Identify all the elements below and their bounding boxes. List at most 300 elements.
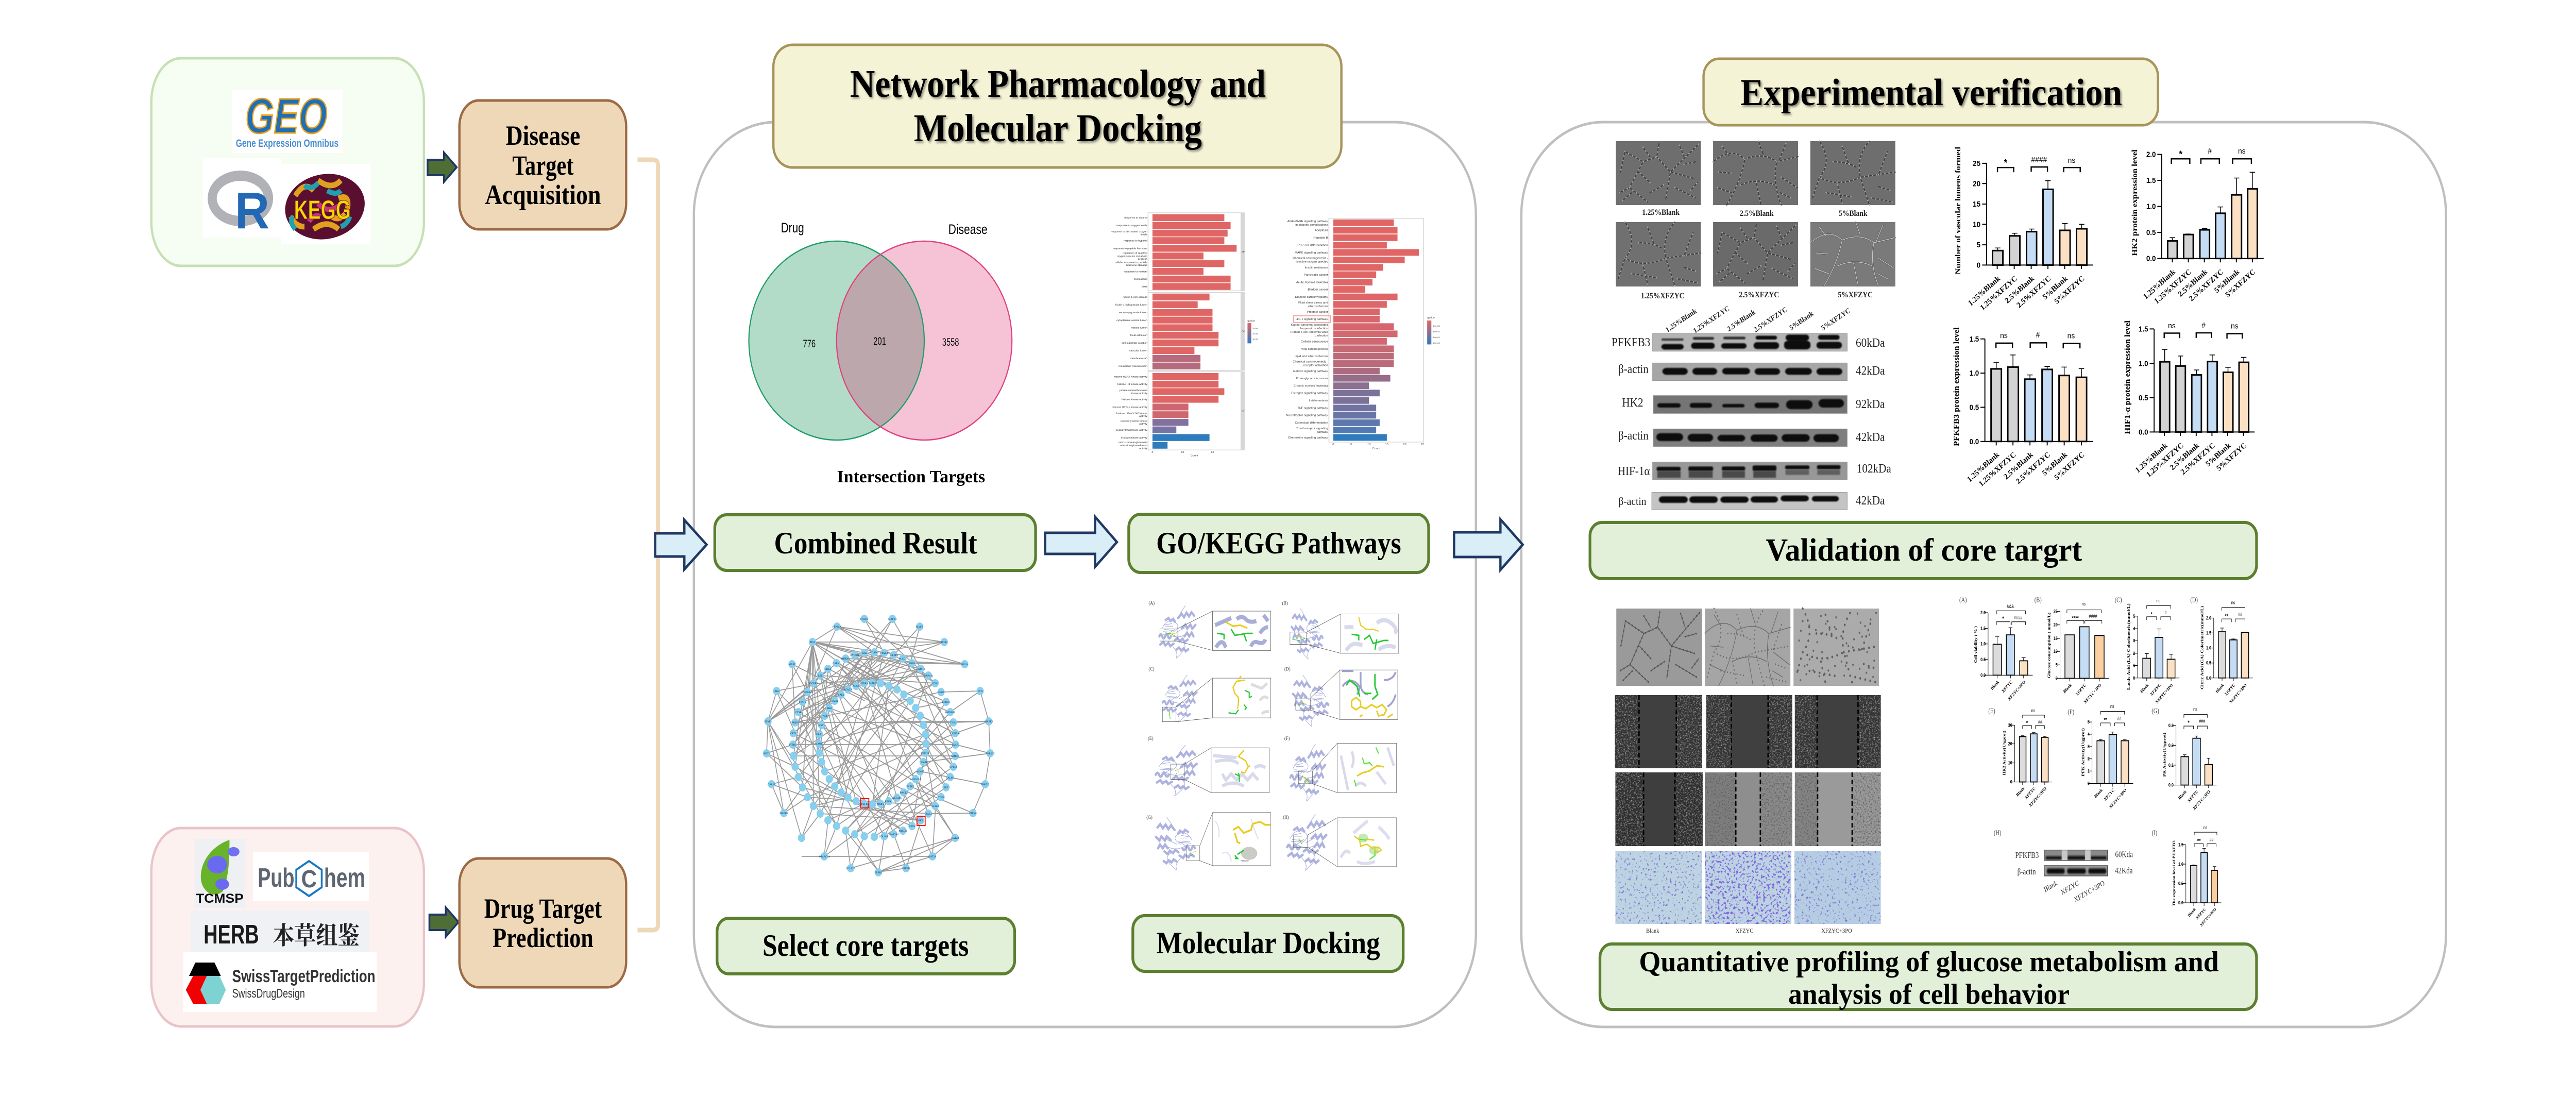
network: protein interaction: RELA bbox=[961, 663, 968, 666]
box: Molecular Docking: Molecular Docking bbox=[1157, 926, 1380, 960]
bar chart: GO enrichment: 1e-08 bbox=[1252, 327, 1258, 330]
chart C: lactic acid: XFZYC bbox=[2149, 682, 2162, 697]
network: protein interaction: IRAK1 bbox=[925, 813, 932, 816]
network: protein interaction: GSK3B bbox=[768, 783, 776, 786]
bar chart: GO enrichment: response to hypoxia bbox=[1124, 240, 1147, 242]
bar chart: GO enrichment: hormone stimulus bbox=[1126, 264, 1148, 267]
western blots: core targets: PFKFB3 bbox=[1612, 335, 1650, 349]
bar chart: GO enrichment: response to peptide hormone bbox=[1113, 247, 1147, 250]
chart F: PFK activity: ns bbox=[2110, 704, 2114, 709]
chart: vascular lumens: 2.5%XFZYC bbox=[2015, 274, 2053, 310]
docking inset B bbox=[1341, 614, 1399, 653]
network: protein interaction: SIRT2 bbox=[869, 682, 876, 685]
chart E: HK2 activity: 10 bbox=[2008, 761, 2012, 766]
network: protein interaction: NQO1 bbox=[853, 685, 860, 688]
chart: HK2 protein expression: 5%XFZYC bbox=[2224, 268, 2257, 299]
network: protein interaction: SAE1 bbox=[838, 694, 844, 697]
chart: PFKFB3 protein expression: 1.5 bbox=[1970, 334, 1979, 343]
bar chart: KEGG enrichment: Hepatitis B bbox=[1313, 237, 1328, 240]
chart: HIF1-α protein expression: 2.5%Blank bbox=[2168, 441, 2201, 472]
chart: HK2 protein expression: # bbox=[2208, 147, 2212, 156]
bar chart: GO enrichment: 10 bbox=[1181, 451, 1184, 454]
arrow: into network pharmacology bbox=[655, 520, 706, 569]
chart A: cell viability: 0.5 bbox=[1980, 657, 1986, 662]
bar chart: GO enrichment: focal adhesion bbox=[1130, 334, 1147, 337]
chart: HK2 protein expression: 2.5%Blank bbox=[2177, 267, 2209, 299]
chart: HIF1-α protein expression: 5%Blank bbox=[2205, 441, 2233, 468]
bar chart: KEGG enrichment: 5 bbox=[1350, 443, 1352, 446]
chart: HK2 protein expression: 0.0 bbox=[2146, 254, 2156, 263]
network: protein interaction: PDGFRB bbox=[808, 682, 819, 685]
bar chart: KEGG enrichment: Bladder cancer bbox=[1308, 289, 1328, 291]
network: protein interaction: AKR1C1 bbox=[986, 752, 995, 755]
chart B: glucose consumption: **** bbox=[2072, 615, 2079, 621]
network: protein interaction: SMARCA4 bbox=[818, 855, 831, 858]
network: protein interaction: DNMT1 bbox=[917, 668, 925, 671]
chart F: PFK activity bbox=[2081, 704, 2133, 810]
chart: HIF1-α protein expression: 2.5%XFZYC bbox=[2179, 441, 2217, 477]
bar chart: GO enrichment: histone H3Y41 kinase activity bbox=[1113, 406, 1148, 409]
logo: PubChem: C bbox=[301, 865, 317, 893]
bar chart: GO enrichment: 20 bbox=[1211, 451, 1214, 454]
box: GO/KEGG Pathways: GO/KEGG Pathways bbox=[1156, 527, 1401, 561]
chart: HK2 protein expression: 2.0 bbox=[2146, 150, 2156, 159]
chart B: glucose consumption bbox=[2047, 601, 2109, 705]
micrographs: tube formation, scratch and transwell assays: Blank bbox=[1646, 927, 1659, 934]
network: protein interaction: AMPD3 bbox=[951, 755, 960, 758]
bar chart: KEGG enrichment: reactive oxygen species bbox=[1296, 261, 1328, 264]
network: protein interaction: ACACA bbox=[843, 688, 853, 692]
western blots: core targets: 102kDa bbox=[1857, 462, 1891, 475]
network: protein interaction: MAP2K4 bbox=[889, 833, 899, 836]
chart B: glucose consumption: 10 bbox=[2054, 649, 2058, 654]
chart I: PFKFB3 expression: 1.5 bbox=[2178, 842, 2183, 848]
bar chart: GO enrichment: 0 bbox=[1151, 451, 1154, 454]
network: protein interaction: TOP1 bbox=[938, 796, 944, 799]
venn diagram: 201 bbox=[873, 335, 886, 347]
bar chart: GO enrichment: kinase activity bbox=[1131, 392, 1148, 395]
logo: R bbox=[202, 158, 281, 239]
network: protein interaction: CALM3 bbox=[946, 777, 955, 780]
box: Combined Result bbox=[715, 515, 1036, 570]
network: protein interaction: ITGA2B bbox=[846, 867, 855, 870]
chart: vascular lumens: ns bbox=[2068, 157, 2075, 165]
chart: PFKFB3 protein expression: ns bbox=[2000, 332, 2008, 340]
western blots: core targets: HK2 bbox=[1622, 396, 1643, 409]
chart E: HK2 activity: HK2 Activity(U/gprot) bbox=[2002, 731, 2006, 775]
chart: HIF1-α protein expression: # bbox=[2201, 321, 2206, 330]
network: protein interaction: STAT3 bbox=[765, 720, 772, 723]
molecular docking images: (A) bbox=[1148, 600, 1155, 606]
bar chart: GO enrichment: 3e-08 bbox=[1252, 338, 1258, 341]
chart A: cell viability: &&& bbox=[2007, 604, 2014, 609]
panel: drug databases bbox=[151, 828, 424, 1026]
docking inset F bbox=[1337, 744, 1397, 792]
network: protein interaction: KAT2B bbox=[951, 837, 959, 840]
chart G: PK activity: XFZYC bbox=[2187, 789, 2199, 803]
bar chart: GO enrichment: cell-substrate junction bbox=[1122, 342, 1147, 345]
network: protein interaction: PARP2 bbox=[791, 721, 799, 724]
bar chart: GO enrichment: oxygen species metabolic bbox=[1117, 255, 1148, 258]
chart D: citric acid: Citric Acid (CA) Colorimetric(mmol/L) bbox=[2200, 605, 2204, 689]
bar chart: GO enrichment: cytoplasmic vesicle lumen bbox=[1116, 319, 1147, 322]
chart: HIF1-α protein expression: 5%XFZYC bbox=[2215, 441, 2248, 473]
network: protein interaction: TNNI3 bbox=[821, 715, 828, 718]
bar chart: KEGG enrichment: Th17 cell differentiation bbox=[1297, 244, 1328, 247]
docking inset E bbox=[1211, 748, 1269, 792]
chart E: HK2 activity: XFZYC bbox=[2024, 786, 2036, 800]
box: Drug Target Prediction bbox=[460, 858, 626, 987]
network: protein interaction: MAPK3 bbox=[985, 720, 993, 723]
bar chart: KEGG enrichment: 25 bbox=[1421, 443, 1424, 446]
bar chart: KEGG enrichment: Chemokine signaling pathway bbox=[1288, 436, 1328, 440]
chart E: HK2 activity: * bbox=[2026, 720, 2028, 727]
chart G: PK activity: XFZYC+3PO bbox=[2192, 789, 2211, 811]
chart D: citric acid: 2.0 bbox=[2206, 616, 2211, 621]
logo: GEO: GEO bbox=[245, 89, 327, 144]
chart: HIF1-α protein expression: 1.25%XFZYC bbox=[2145, 441, 2185, 479]
venn diagram: 3558 bbox=[942, 336, 959, 348]
chart C: lactic acid: 3 bbox=[2133, 638, 2136, 644]
chart F: PFK activity: 5 bbox=[2088, 719, 2090, 724]
chart: HK2 protein expression: 2.5%XFZYC bbox=[2188, 268, 2225, 303]
chart: HIF1-α protein expression: 1.25%Blank bbox=[2134, 441, 2170, 475]
bar chart: KEGG enrichment: Chemical carcinogenesis - bbox=[1293, 257, 1328, 260]
network: protein interaction: KAT2A bbox=[928, 855, 937, 858]
box: Disease Target Acquisition: Disease bbox=[506, 121, 580, 151]
venn diagram: Drug bbox=[781, 221, 804, 235]
chart A: cell viability: Cell viability ( % ) bbox=[1974, 626, 1978, 663]
network: protein interaction: FYN bbox=[978, 690, 983, 693]
box: GO/KEGG Pathways bbox=[1129, 514, 1429, 572]
network: protein interaction: PRMT1 bbox=[921, 752, 929, 755]
chart C: lactic acid bbox=[2127, 598, 2179, 705]
bar chart: KEGG enrichment: TNF signaling pathway bbox=[1297, 407, 1328, 410]
chart: vascular lumens: 5%Blank bbox=[2041, 274, 2070, 301]
chart D: citric acid: XFZYC bbox=[2224, 682, 2236, 697]
chart I: PFKFB3 expression: XFZYC bbox=[2195, 907, 2207, 921]
bar chart: KEGG enrichment: Viral carcinogenesis bbox=[1301, 348, 1328, 351]
bar chart: KEGG enrichment: Proteoglycans in cancer bbox=[1296, 377, 1328, 380]
bar chart: KEGG enrichment: Leishmaniasis bbox=[1309, 399, 1328, 402]
bar chart: GO enrichment: ficolin-1-rich granule bbox=[1123, 296, 1147, 299]
bar chart: GO enrichment: membrane raft bbox=[1130, 357, 1148, 360]
chart: vascular lumens: 20 bbox=[1973, 179, 1980, 188]
chart F: PFK activity: XFZYC+3PO bbox=[2109, 787, 2127, 810]
network: protein interaction: FASN bbox=[832, 700, 838, 703]
chart C: lactic acid: 1 bbox=[2133, 663, 2136, 668]
chart: HIF1-α protein expression: ns bbox=[2168, 322, 2176, 330]
title: Network Pharmacology and Molecular Docking: Network Pharmacology and bbox=[850, 62, 1266, 106]
chart C: lactic acid: Blank bbox=[2140, 682, 2149, 694]
chart: HIF1-α protein expression: HIF1-α protein expression level bbox=[2123, 321, 2132, 434]
arrow: databases to drug target bbox=[429, 907, 459, 937]
transwell row bbox=[1615, 851, 1881, 924]
arrow: into experimental verification bbox=[1454, 519, 1523, 570]
docking inset G bbox=[1213, 813, 1271, 866]
bar chart: KEGG enrichment: atherosclerosis bbox=[1308, 305, 1328, 308]
chart B: glucose consumption: 5 bbox=[2056, 663, 2058, 668]
bar charts: validation bbox=[1952, 147, 2264, 488]
bar chart: KEGG enrichment: 5.0e-05 bbox=[1433, 325, 1440, 327]
western blots: core targets: 42kDa bbox=[1856, 430, 1885, 444]
network: protein interaction: PRKCQ bbox=[981, 783, 989, 786]
chart D: citric acid: 0.0 bbox=[2206, 676, 2211, 681]
chart F: PFK activity: Blank bbox=[2093, 787, 2104, 799]
network: protein interaction: TNK2 bbox=[950, 721, 957, 724]
chart F: PFK activity: ** bbox=[2104, 717, 2107, 723]
bar chart: KEGG enrichment: Diabetic cardiomyopathy bbox=[1295, 296, 1328, 299]
chart: PFKFB3 protein expression: 1.0 bbox=[1970, 369, 1979, 377]
network: protein interaction: VCAM1 bbox=[870, 651, 879, 654]
chart: vascular lumens bbox=[1954, 147, 2093, 312]
chart D: citric acid: 1.0 bbox=[2206, 646, 2211, 651]
chart B: glucose consumption: Glucose consumption ( mmol/L) bbox=[2047, 612, 2051, 679]
docking inset G: ASN-259 bbox=[1241, 859, 1249, 862]
bar chart: GO enrichment: activity bbox=[1139, 423, 1148, 426]
panel: disease databases bbox=[151, 58, 424, 266]
network: protein interaction: PTK2B bbox=[902, 867, 910, 870]
network: protein interaction: FKBP5 bbox=[906, 785, 914, 788]
network: protein interaction: SIRT1 bbox=[818, 724, 825, 727]
chart: PFKFB3 protein expression: 1.25%XFZYC bbox=[1977, 450, 2018, 488]
chart G: PK activity: 0.3 bbox=[2168, 723, 2174, 728]
network: protein interaction: IMPDH2 bbox=[841, 657, 851, 661]
chart F: PFK activity: 0 bbox=[2088, 781, 2090, 786]
bar chart: KEGG enrichment: MAPK signaling pathway bbox=[1295, 251, 1328, 255]
chart I: PFKFB3 expression: ns bbox=[2204, 825, 2207, 830]
chart: vascular lumens: 2.5%Blank bbox=[2004, 274, 2036, 305]
bar chart: GO enrichment: chemotaxis bbox=[1134, 278, 1148, 281]
micrographs: tube formation six panels: 1.25%XFZYC bbox=[1641, 292, 1685, 300]
bar chart: KEGG enrichment: 20 bbox=[1403, 443, 1406, 446]
bar chart: KEGG enrichment: in diabetic complications bbox=[1295, 224, 1328, 227]
chart: PFKFB3 protein expression bbox=[1952, 327, 2093, 488]
bar chart: KEGG enrichment: Fluid shear stress and bbox=[1298, 301, 1328, 305]
bar chart: KEGG enrichment: Lipid and atherosclerosis bbox=[1295, 355, 1328, 358]
docking inset H bbox=[1337, 818, 1397, 867]
bar chart: KEGG enrichment: Acute myeloid leukemia bbox=[1296, 281, 1328, 284]
bar chart: KEGG enrichment: 15 bbox=[1385, 443, 1388, 446]
box: Disease Target Acquisition: Target bbox=[512, 150, 574, 181]
chart A: cell viability: 1.5 bbox=[1980, 626, 1986, 631]
micrographs: tube formation, scratch and transwell assays: XFZYC+3PO bbox=[1821, 927, 1852, 934]
network: protein interaction: DDR1 bbox=[941, 641, 947, 644]
bar chart: KEGG enrichment: Kaposi sarcoma-associated bbox=[1291, 324, 1328, 327]
chart G: PK activity: Blank bbox=[2177, 789, 2188, 801]
chart I: PFKFB3 expression: ## bbox=[2209, 837, 2214, 842]
venn diagram bbox=[749, 221, 1012, 486]
bar chart: GO enrichment: vesicle lumen bbox=[1131, 327, 1147, 330]
chart D: citric acid: ** bbox=[2225, 613, 2228, 619]
bar chart: GO enrichment: taxis bbox=[1142, 285, 1148, 289]
chart G: PK activity: 0.0 bbox=[2168, 783, 2174, 788]
western blot H: PFKFB3: 42Kda bbox=[2115, 867, 2133, 876]
bar chart: GO enrichment: peptidyltransferase activity bbox=[1116, 429, 1148, 432]
western blot H: PFKFB3: PFKFB3 bbox=[2015, 851, 2039, 860]
western blots: core targets: 5%Blank bbox=[1788, 309, 1815, 332]
chart E: HK2 activity bbox=[2002, 708, 2052, 808]
chart A: cell viability: * bbox=[2002, 616, 2004, 622]
bar chart: KEGG enrichment: Neurotrophin signaling pathway bbox=[1286, 414, 1328, 417]
chart: HIF1-α protein expression: 1.5 bbox=[2139, 325, 2148, 333]
bar chart: KEGG enrichment: Chemical carcinogenesis - bbox=[1293, 361, 1328, 364]
bar charts: glucose metabolism: (G) bbox=[2151, 707, 2159, 715]
docking inset C bbox=[1213, 676, 1271, 718]
logo: SwissTargetPrediction bbox=[183, 952, 377, 1012]
chart F: PFK activity: 4 bbox=[2088, 732, 2090, 737]
network: protein interaction: AHR bbox=[827, 707, 832, 710]
bar chart: KEGG enrichment: AGE-RAGE signaling pathway bbox=[1287, 220, 1328, 223]
chart B: glucose consumption: ns bbox=[2082, 601, 2086, 606]
network: protein interaction: HCK bbox=[862, 652, 868, 655]
bar chart: GO enrichment: histone H3 kinase activity bbox=[1117, 383, 1148, 386]
logo: PubChem: hem bbox=[324, 863, 365, 893]
bar chart: GO enrichment: response to decreased oxygen bbox=[1111, 230, 1147, 233]
logo: TCMSP: TCMSP bbox=[196, 891, 244, 905]
network: protein interaction: MAPK1 bbox=[888, 618, 897, 621]
bar charts: glucose metabolism: (B) bbox=[2035, 596, 2042, 604]
chart: PFKFB3 protein expression: 5%Blank bbox=[2041, 450, 2069, 478]
logo: HERB: HERB bbox=[204, 920, 259, 950]
micrographs: tube formation, scratch and transwell assays: XFZYC bbox=[1736, 927, 1753, 934]
bracket: joining both target sets bbox=[637, 160, 658, 930]
bar chart: KEGG enrichment: Chronic myeloid leukemia bbox=[1294, 385, 1328, 387]
bar chart: GO enrichment: ADP-ribosyltransferase bbox=[1120, 444, 1147, 447]
bar chart: GO enrichment: levels bbox=[1141, 233, 1148, 236]
molecular docking images: (H) bbox=[1283, 814, 1289, 820]
network: protein interaction: CAPN1 bbox=[833, 662, 841, 665]
logo: KEGG: KEGG bbox=[294, 195, 351, 225]
panel: experimental container bbox=[1521, 122, 2446, 1027]
bar chart: KEGG enrichment: 10 bbox=[1367, 443, 1370, 446]
western blots: core targets: 42kDa bbox=[1856, 364, 1885, 377]
bar charts: glucose metabolism: (H) bbox=[1994, 829, 2001, 837]
chart F: PFK activity: 1 bbox=[2088, 769, 2090, 774]
bar chart: KEGG enrichment: Prostate cancer bbox=[1307, 311, 1328, 314]
bar chart: KEGG enrichment: Estrogen signaling pathway bbox=[1291, 392, 1328, 395]
tube formation row bbox=[1616, 609, 1879, 686]
western blots: core targets: 42kDa bbox=[1856, 494, 1885, 507]
chart I: PFKFB3 expression: The expression level of PFKFB3 bbox=[2172, 840, 2176, 906]
micrographs: tube formation six panels: 5%XFZYC bbox=[1838, 291, 1873, 299]
network: protein interaction: CPT2 bbox=[790, 732, 796, 735]
chart: vascular lumens: #### bbox=[2031, 156, 2047, 164]
western blots: core targets bbox=[1612, 304, 1891, 510]
chart C: lactic acid: 5 bbox=[2133, 614, 2136, 619]
chart B: glucose consumption: Blank bbox=[2062, 682, 2072, 694]
bar chart: GO enrichment: protein serine/threonine bbox=[1120, 389, 1147, 392]
bar charts: glucose metabolism: (I) bbox=[2152, 829, 2157, 837]
chart A: cell viability: XFZYC+3PO bbox=[2007, 679, 2026, 702]
network: protein interaction: IGFBP3 bbox=[890, 654, 898, 657]
panel: network pharmacology container bbox=[694, 122, 1476, 1027]
logo: R: R bbox=[235, 182, 269, 239]
molecular docking images: (G) bbox=[1146, 814, 1153, 820]
bar chart: KEGG enrichment: Relaxin signaling pathway bbox=[1293, 370, 1328, 373]
chart A: cell viability: 2.0 bbox=[1980, 610, 1986, 615]
network: protein interaction: TAAR1 bbox=[952, 744, 960, 747]
bar chart: GO enrichment: regulation of reactive bbox=[1123, 252, 1147, 255]
network: protein interaction: EZR bbox=[818, 674, 823, 678]
chart I: PFKFB3 expression bbox=[2172, 825, 2222, 927]
western blots: core targets: 1.25%XFZYC bbox=[1692, 304, 1731, 335]
title: Experimental verification: Experimental verification bbox=[1740, 72, 2122, 114]
western blots: core targets: 1.25%Blank bbox=[1664, 307, 1698, 334]
chart: HIF1-α protein expression: 1.0 bbox=[2139, 359, 2148, 367]
box: Quantitative profiling bbox=[1600, 944, 2257, 1010]
chart: vascular lumens: Number of vascular lumens formed bbox=[1954, 147, 1962, 274]
chart: HIF1-α protein expression: 0.5 bbox=[2139, 394, 2148, 402]
logo: SwissTargetPrediction: SwissTargetPrediction bbox=[232, 966, 376, 986]
network: protein interaction: MMP9 bbox=[916, 626, 923, 629]
bar chart: KEGG enrichment: T cell receptor signaling bbox=[1296, 427, 1328, 430]
box: Drug Target Prediction: Prediction bbox=[493, 923, 594, 954]
box: Drug Target Prediction: Drug Target bbox=[484, 893, 602, 924]
chart: HK2 protein expression: 1.0 bbox=[2146, 202, 2156, 211]
bar chart: GO enrichment: activity bbox=[1139, 415, 1148, 418]
network: protein interaction: STAT6 bbox=[799, 701, 806, 704]
bar chart: GO enrichment: histone kinase activity bbox=[1122, 398, 1148, 401]
bar chart: KEGG enrichment: qvalue bbox=[1427, 316, 1435, 319]
network: protein interaction: PPP2CA bbox=[833, 626, 841, 629]
western blots: core targets: 2.5%Blank bbox=[1726, 308, 1757, 333]
bar chart: GO enrichment: process bbox=[1138, 258, 1148, 261]
chart C: lactic acid: ns bbox=[2156, 598, 2160, 603]
bar chart: GO enrichment: vacuolar lumen bbox=[1129, 349, 1147, 352]
network: protein interaction: BACE2 bbox=[900, 791, 908, 795]
logo: PubChem bbox=[253, 852, 369, 901]
chart F: PFK activity: XFZYC bbox=[2103, 787, 2115, 802]
chart: HIF1-α protein expression bbox=[2123, 321, 2255, 479]
network: protein interaction: LTA4H bbox=[920, 761, 927, 764]
bar chart: KEGG enrichment: 1.5e-04 bbox=[1433, 342, 1440, 344]
bar chart: GO enrichment: protein tyrosine kinase bbox=[1121, 420, 1147, 423]
docking inset D bbox=[1340, 670, 1398, 719]
chart: vascular lumens: 1.25%Blank bbox=[1967, 274, 2002, 308]
logo: PubChem: Pub bbox=[258, 863, 295, 893]
bar chart: GO enrichment: endopeptidase activity bbox=[1121, 436, 1148, 440]
western blots: core targets: 92kDa bbox=[1856, 397, 1885, 411]
bar chart: KEGG enrichment: herpesvirus infection bbox=[1300, 327, 1328, 330]
chart C: lactic acid: 4 bbox=[2133, 626, 2136, 631]
bar chart: KEGG enrichment: 1.0e-04 bbox=[1433, 336, 1440, 339]
molecular docking images: (C) bbox=[1148, 666, 1155, 672]
western blots: core targets: 5%XFZYC bbox=[1820, 306, 1852, 332]
bar chart: KEGG enrichment bbox=[1286, 218, 1440, 450]
network: protein interaction: HSP90AA1 bbox=[802, 691, 814, 694]
chart D: citric acid: XFZYC+3PO bbox=[2229, 683, 2247, 705]
chart: PFKFB3 protein expression: 5%XFZYC bbox=[2053, 450, 2086, 482]
chart C: lactic acid: * bbox=[2151, 612, 2153, 618]
box: Validation of core targrt: Validation of core targrt bbox=[1766, 532, 2082, 568]
micrographs: tube formation six panels: 5%Blank bbox=[1839, 209, 1868, 218]
chart: HK2 protein expression bbox=[2131, 147, 2264, 306]
chart F: PFK activity: PFK Activity(U/gprot) bbox=[2081, 728, 2085, 777]
network: protein interaction: ALOX15A bbox=[910, 778, 921, 781]
bar chart: GO enrichment: cellular response to peptide bbox=[1115, 261, 1147, 264]
molecular docking images: (F) bbox=[1284, 735, 1290, 741]
logo: KEGG bbox=[281, 164, 371, 245]
bar chart: GO enrichment bbox=[1111, 213, 1258, 458]
western blots: core targets: HIF-1α bbox=[1618, 464, 1650, 478]
chart B: glucose consumption: 15 bbox=[2054, 636, 2058, 641]
bar chart: GO enrichment: response to nutrient bbox=[1124, 270, 1148, 273]
chart: vascular lumens: 5 bbox=[1977, 241, 1980, 249]
bar charts: glucose metabolism: (E) bbox=[1988, 707, 1995, 715]
network: protein interaction: CDK2 bbox=[932, 682, 939, 685]
docking inset A bbox=[1213, 611, 1271, 650]
